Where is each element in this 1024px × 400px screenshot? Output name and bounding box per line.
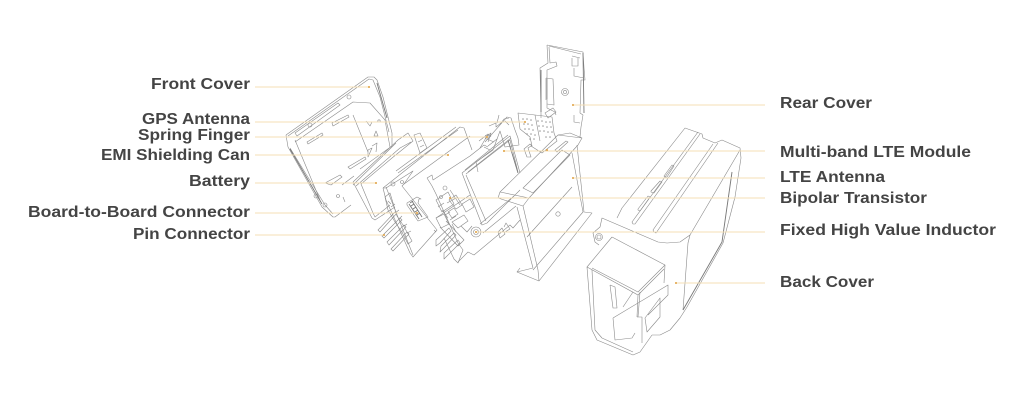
leader lines bbox=[255, 87, 765, 283]
label: EMI Shielding Can: EMI Shielding Can bbox=[101, 147, 250, 164]
part: battery bbox=[353, 133, 427, 220]
part: GPS antenna mesh bbox=[518, 113, 557, 157]
right labels bbox=[780, 95, 996, 291]
label: Board-to-Board Connector: Board-to-Board Connector bbox=[28, 204, 250, 221]
label: GPS Antenna: GPS Antenna bbox=[142, 111, 250, 128]
label: Spring Finger: Spring Finger bbox=[138, 127, 250, 144]
part: board-to-board connector bbox=[407, 197, 428, 221]
label: Pin Connector: Pin Connector bbox=[133, 226, 250, 243]
label: Rear Cover: Rear Cover bbox=[780, 95, 872, 112]
part: front cover bbox=[286, 77, 392, 217]
label: Multi-band LTE Module: Multi-band LTE Module bbox=[780, 144, 971, 161]
label: Bipolar Transistor: Bipolar Transistor bbox=[780, 190, 927, 207]
part: rear cover bbox=[540, 45, 585, 137]
left labels bbox=[28, 76, 250, 243]
part: spring finger bbox=[480, 133, 494, 150]
label: Battery: Battery bbox=[189, 173, 250, 190]
part: EMI shielding can bbox=[383, 127, 472, 257]
part: multi-band LTE module board bbox=[427, 115, 520, 263]
label: Fixed High Value Inductor: Fixed High Value Inductor bbox=[780, 222, 996, 239]
label: LTE Antenna: LTE Antenna bbox=[780, 169, 885, 186]
part: LTE antenna bbox=[498, 133, 592, 281]
leader end dots bbox=[368, 86, 677, 284]
part: pin connector bbox=[378, 193, 412, 251]
label: Front Cover: Front Cover bbox=[151, 76, 250, 93]
label: Back Cover: Back Cover bbox=[780, 274, 874, 291]
part: back cover bbox=[587, 128, 741, 355]
